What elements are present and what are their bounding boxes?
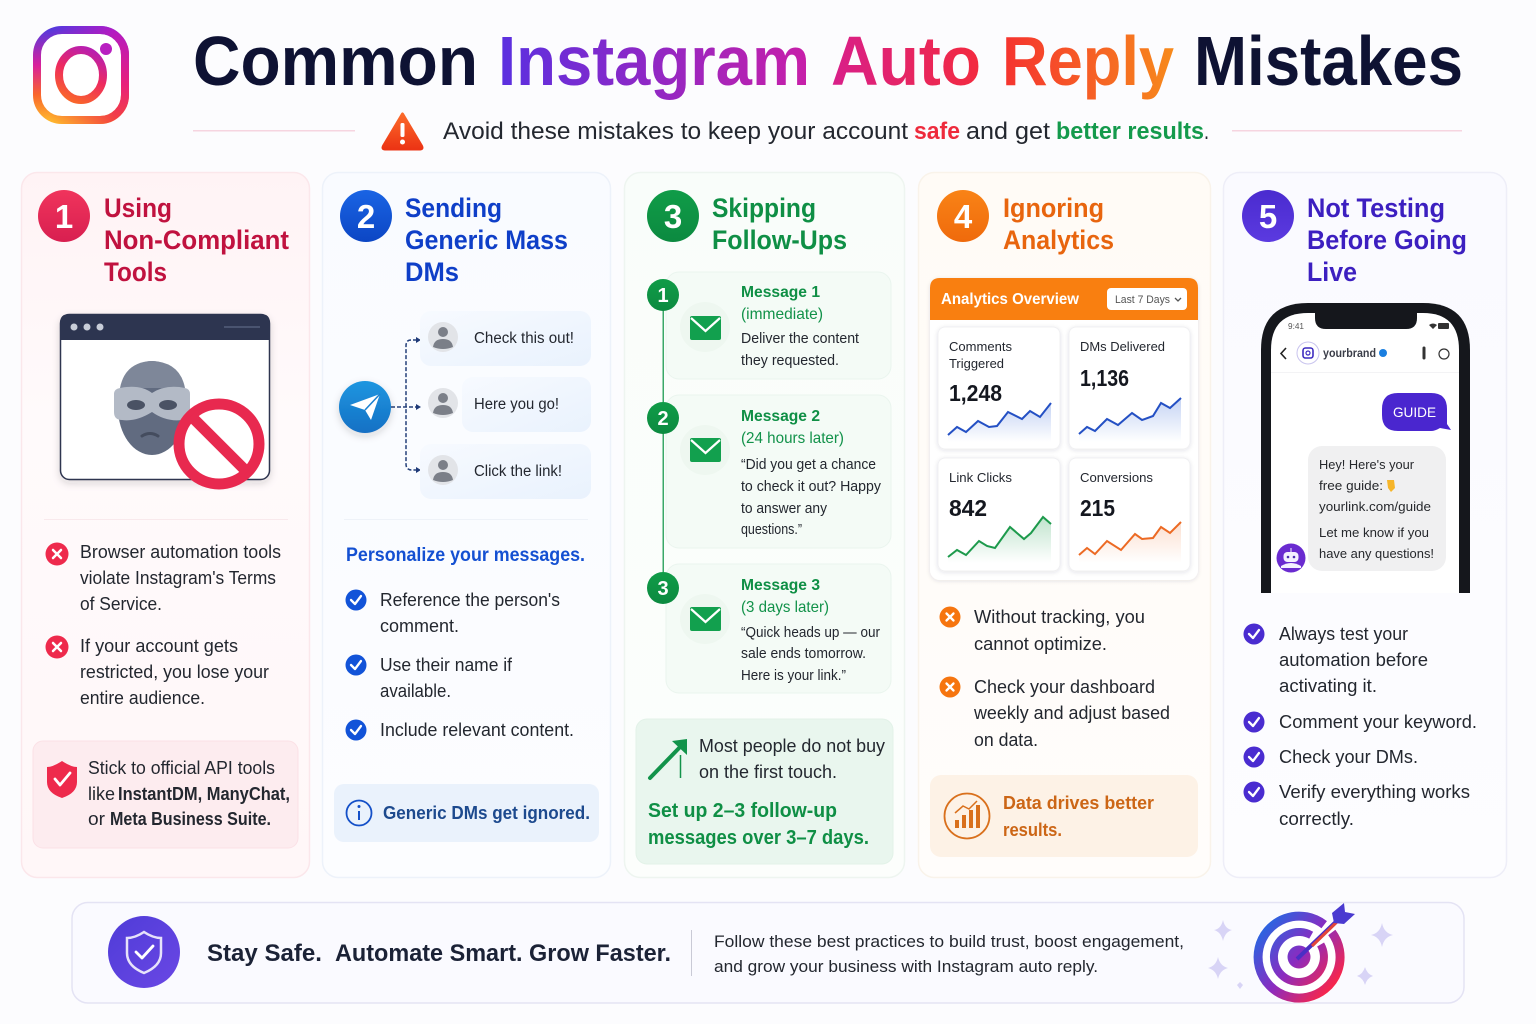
number badge 2 [340, 190, 392, 242]
step: message 3: 3 [657, 578, 669, 600]
panel: 2 sending generic mass DMs [322, 172, 610, 878]
send icon [339, 381, 391, 433]
phone mockup: 9:41 [1288, 321, 1304, 331]
panel: 1 using non-compliant tools [22, 172, 310, 878]
message: click the link: Click the link! [474, 463, 562, 480]
heading [104, 193, 289, 287]
heading: Sending [405, 193, 502, 223]
bullet: browser automation: violate Instagram's Terms [80, 568, 276, 588]
number badge 1 [38, 190, 90, 242]
step: message 3: “Quick heads up — our [741, 625, 880, 641]
bullet: reference comment [346, 590, 560, 636]
step: message 1 [647, 272, 891, 379]
metric: conversions: Conversions [1080, 471, 1153, 485]
number badge 3: 3 [664, 198, 682, 235]
heading: Skipping [712, 193, 816, 223]
step: message 2: to check it out? Happy [741, 479, 882, 495]
banner headline: Stay Safe. [207, 940, 322, 967]
panel: 4 ignoring analytics [918, 172, 1210, 878]
dashboard header: Analytics Overview [941, 291, 1080, 308]
metric: comments triggered: Comments [949, 340, 1012, 354]
bullet: always test: activating it. [1279, 676, 1377, 696]
callout: set up follow-ups: Set up 2–3 follow-up [648, 800, 837, 822]
bullet: verify everything: Verify everything works [1279, 782, 1470, 802]
dashboard header [930, 278, 1198, 320]
metric: link clicks: 842 [949, 495, 987, 521]
heading: Live [1307, 257, 1357, 287]
number badge 5: 5 [1259, 198, 1277, 235]
bullet: check dashboard: Check your dashboard [974, 677, 1155, 697]
heading: Analytics [1003, 225, 1114, 255]
number badge 2: 2 [357, 198, 375, 235]
heading: DMs [405, 257, 459, 287]
metric: comments triggered: Triggered [949, 357, 1004, 371]
bullet: account restricted [46, 636, 269, 708]
bullet: check dashboard: on data. [974, 730, 1038, 750]
callout: set up follow-ups [636, 719, 893, 864]
chat bubble: GUIDE: GUIDE [1393, 404, 1436, 420]
diagram: one message sent to many [339, 311, 591, 499]
phone mockup [1261, 303, 1470, 593]
bullet: browser automation: Browser automation tools [80, 542, 281, 562]
bullet: without tracking [940, 606, 1145, 654]
banner description: and grow your business with Instagram auto reply. [714, 958, 1098, 976]
chat bubble: auto reply: free guide: [1319, 478, 1383, 493]
heading: Before Going [1307, 225, 1467, 255]
number badge 1: 1 [55, 198, 73, 235]
icon: Instagram logo [37, 30, 125, 120]
heading [405, 193, 568, 287]
callout: set up follow-ups: messages over 3–7 days. [648, 827, 869, 849]
step: message 1: Message 1 [741, 284, 820, 301]
metric: comments triggered [938, 327, 1060, 449]
title: Instagram [498, 22, 810, 100]
chat bubble: auto reply: Hey! Here's your [1319, 457, 1415, 472]
step: message 1: they requested. [741, 353, 839, 369]
callout: official API tools: Stick to official API tools [88, 758, 275, 778]
title: Auto [831, 22, 981, 100]
message: check this out [420, 311, 591, 366]
title: Mistakes [1194, 22, 1463, 100]
bullet: check dashboard [940, 676, 1170, 750]
heading: Non-Compliant [104, 225, 289, 255]
step: message 3 [647, 564, 891, 693]
bullet: comment keyword: Comment your keyword. [1279, 712, 1477, 732]
bullet: use their name: available. [380, 681, 451, 701]
bullet: verify everything [1244, 782, 1470, 829]
chat bubble: auto reply [1308, 446, 1446, 571]
heading: Ignoring [1003, 193, 1104, 223]
step: message 2: questions.” [741, 522, 802, 538]
bullet: browser automation [46, 542, 281, 614]
number badge 4: 4 [954, 198, 973, 235]
banner headline: Automate Smart. Grow Faster. [335, 940, 671, 967]
subtitle: safe [914, 118, 960, 145]
icon: target with arrow [1253, 903, 1355, 1003]
panel: 5 not testing before going live [1224, 172, 1506, 878]
bullet: always test: Always test your [1279, 624, 1408, 644]
metric: link clicks: Link Clicks [949, 471, 1012, 485]
callout: official API tools [33, 741, 298, 848]
heading: Tools [104, 257, 167, 287]
chat bubble: GUIDE [1382, 393, 1451, 431]
number badge 3 [647, 190, 699, 242]
metric: conversions [1069, 458, 1190, 571]
bullet: use their name [346, 654, 513, 701]
step: message 1: Deliver the content [741, 331, 859, 347]
callout: set up follow-ups: on the first touch. [699, 762, 837, 782]
message: here you go: Here you go! [474, 396, 559, 413]
bullet: reference comment: comment. [380, 616, 459, 636]
callout: official API tools: like [88, 784, 115, 804]
callout: generic DMs get ignored [334, 784, 599, 842]
heading: Follow-Ups [712, 225, 847, 255]
callout: generic DMs get ignored: Generic DMs get ignored. [383, 803, 590, 823]
bullet: use their name: Use their name if [380, 655, 513, 675]
heading [1003, 193, 1114, 255]
bullet: without tracking: Without tracking, you [974, 607, 1145, 627]
dashboard header: Last 7 Days [1115, 294, 1170, 306]
bullet: relevant content: Include relevant content. [380, 720, 574, 740]
heading [712, 193, 847, 255]
callout: official API tools: or [88, 809, 105, 829]
step: message 3: Here is your link.” [741, 668, 846, 684]
metric: DMs delivered [1069, 327, 1190, 449]
step: message 3: Message 3 [741, 577, 820, 594]
step: message 2: to answer any [741, 501, 828, 517]
step: message 3: sale ends tomorrow. [741, 646, 866, 662]
illustration: browser window with masked face and prohibition sign [60, 314, 270, 484]
bullet: check dashboard: weekly and adjust based [973, 703, 1170, 723]
subtitle: Avoid these mistakes to keep your account [443, 118, 908, 145]
bullet: without tracking: cannot optimize. [974, 634, 1107, 654]
callout: official API tools: Meta Business Suite. [110, 809, 271, 829]
chat bubble: auto reply: Let me know if you [1319, 525, 1429, 540]
title: Reply [1002, 22, 1174, 100]
title [193, 22, 1463, 100]
bullet: account restricted: restricted, you lose your [80, 662, 269, 682]
step: message 2: “Did you get a chance [741, 457, 876, 473]
heading: Generic Mass [405, 225, 568, 255]
bullet: verify everything: correctly. [1279, 809, 1354, 829]
metric: comments triggered: 1,248 [949, 380, 1002, 406]
callout: data drives better results: results. [1003, 820, 1062, 840]
callout: set up follow-ups: Most people do not buy [699, 736, 885, 756]
callout: official API tools: InstantDM, ManyChat, [118, 784, 290, 804]
subtitle [193, 118, 1462, 145]
heading: Using [104, 193, 172, 223]
number badge 4 [937, 190, 989, 242]
heading [1307, 193, 1467, 287]
banner description: Follow these best practices to build trust, boost engagement, [714, 933, 1184, 951]
subtitle: . [1204, 118, 1209, 145]
banner description [714, 933, 1184, 976]
subheading: personalize: Personalize your messages. [346, 545, 585, 566]
metric: DMs delivered: DMs Delivered [1080, 340, 1165, 354]
step: message 2: (24 hours later) [741, 430, 844, 447]
bullet: always test: automation before [1279, 650, 1428, 670]
panel: 3 skipping follow-ups [624, 172, 904, 878]
number badge 5 [1242, 190, 1294, 242]
chat bubble: auto reply: have any questions! [1319, 546, 1434, 561]
dashboard: analytics overview [930, 278, 1198, 580]
bullet: browser automation: of Service. [80, 594, 162, 614]
message: check this out: Check this out! [474, 330, 574, 347]
metric: link clicks [938, 458, 1060, 571]
subtitle: better results [1056, 118, 1204, 145]
chat bubble: auto reply: yourlink.com/guide [1319, 499, 1431, 514]
bullet: check DMs: Check your DMs. [1279, 747, 1418, 767]
bullet: account restricted: entire audience. [80, 688, 205, 708]
chat header [1271, 342, 1459, 373]
step: message 2: 2 [657, 408, 669, 430]
bullet: account restricted: If your account gets [80, 636, 238, 656]
step: message 1: (immediate) [741, 306, 823, 323]
step: message 3: (3 days later) [741, 599, 829, 616]
subtitle: and get [966, 118, 1050, 145]
icon: shield badge [108, 916, 180, 988]
title: Common [193, 22, 478, 100]
metric: conversions: 215 [1080, 495, 1115, 521]
icon: bot avatar [1276, 544, 1306, 572]
icon: warning triangle [383, 114, 422, 149]
heading: Not Testing [1307, 193, 1445, 223]
chat header: yourbrand [1323, 348, 1376, 360]
callout: data drives better results [930, 775, 1198, 857]
message: here you go [428, 377, 591, 432]
bullet: always test [1244, 624, 1428, 696]
step: message 2: Message 2 [741, 408, 820, 425]
icon: sparkles [1208, 920, 1393, 989]
bullet: reference comment: Reference the person's [380, 590, 560, 610]
message: click the link [420, 444, 591, 499]
step: message 2 [647, 395, 891, 548]
footer banner [72, 902, 1464, 1003]
step: message 1: 1 [657, 285, 669, 307]
callout: data drives better results: Data drives better [1003, 793, 1154, 813]
metric: DMs delivered: 1,136 [1080, 365, 1129, 391]
